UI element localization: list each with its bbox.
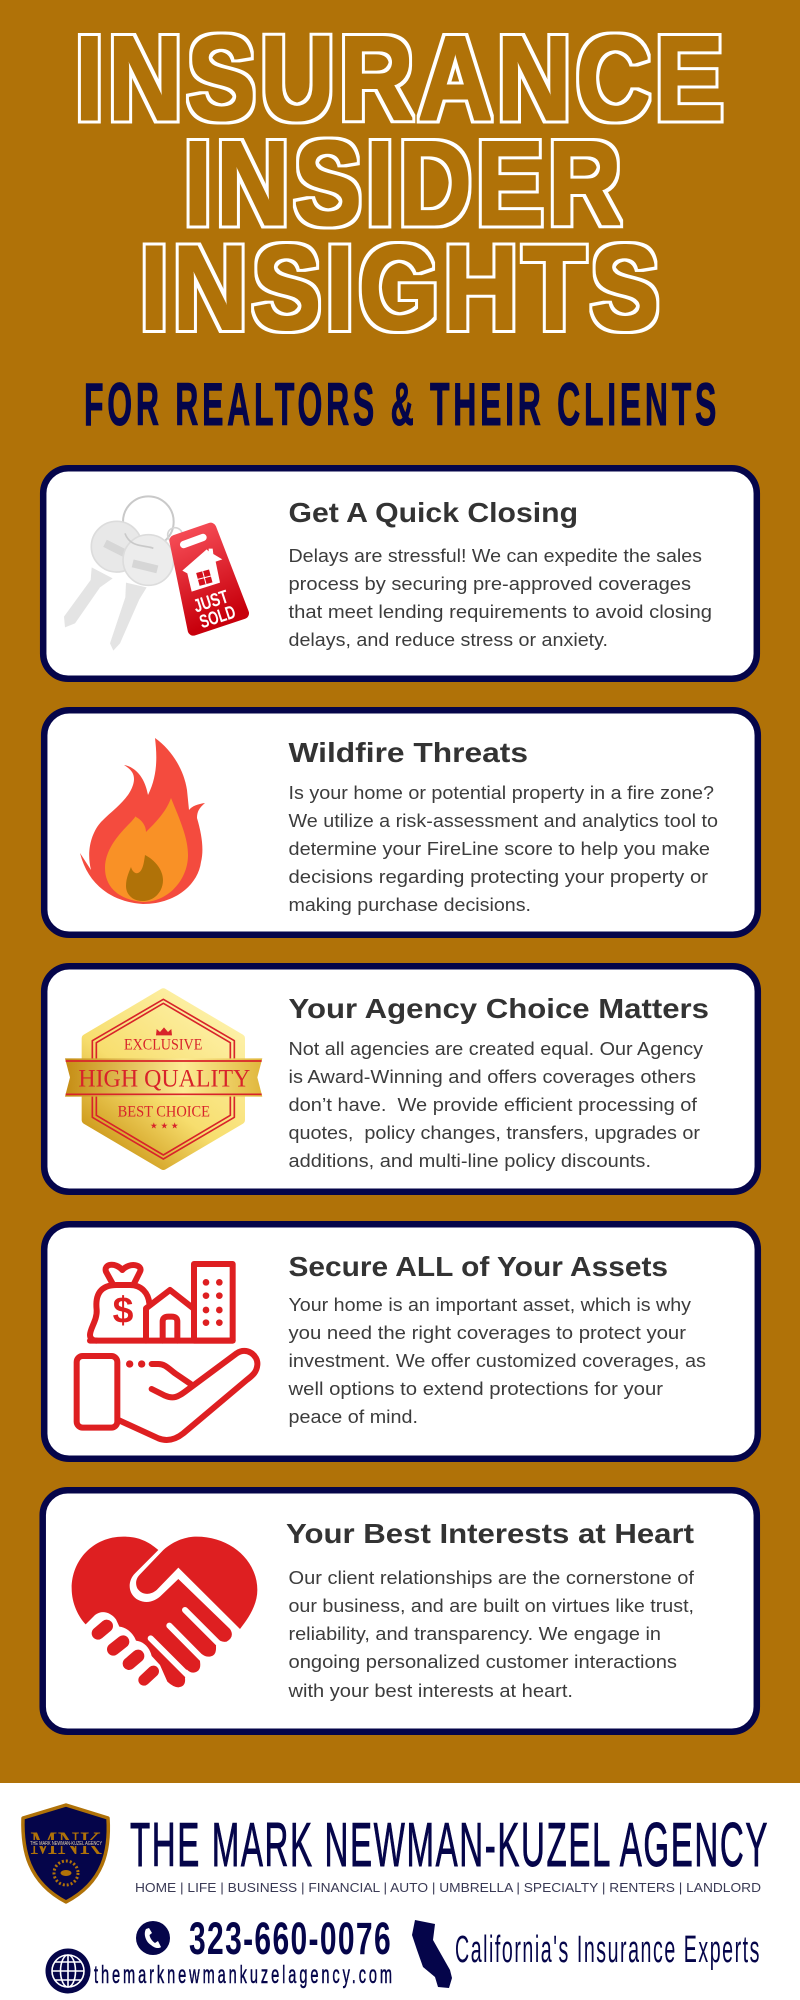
body text (287, 1567, 695, 1701)
body text: quotes, policy changes, transfers, upgrades or (288, 1122, 700, 1143)
body text: peace of mind. (288, 1406, 418, 1427)
heading: Wildfire Threats (288, 737, 528, 768)
phone number: 323-660-0076 (189, 1913, 392, 1964)
body text: ongoing personalized customer interactions (288, 1651, 677, 1672)
footer (0, 1783, 800, 2000)
title (75, 11, 728, 355)
panel: wildfire threats (44, 710, 758, 935)
body text: Not all agencies are created equal. Our Agency (288, 1038, 704, 1059)
icon: agency shield logo: MNK (30, 1826, 102, 1862)
body text: Is your home or potential property in a fire zone? (288, 782, 714, 803)
icon: phone (136, 1921, 170, 1955)
icon: agency shield logo (23, 1805, 108, 1902)
body text: investment. We offer customized coverages, as (288, 1350, 706, 1371)
body text: additions, and multi-line policy discounts. (288, 1150, 651, 1171)
icon: house keys with just sold tag: JUST (191, 585, 231, 616)
body text: We utilize a risk-assessment and analytics tool to (288, 810, 718, 831)
body text: reliability, and transparency. We engage in (288, 1623, 661, 1644)
body text: making purchase decisions. (288, 894, 531, 915)
icon: handshake heart (72, 1537, 257, 1687)
body text: delays, and reduce stress or anxiety. (288, 629, 608, 650)
body text: our business, and are built on virtues like trust, (288, 1595, 694, 1616)
body text: Delays are stressful! We can expedite the sales (288, 545, 702, 566)
body text: Our client relationships are the cornerstone of (288, 1567, 695, 1588)
body text: well options to extend protections for your (287, 1378, 663, 1399)
icon: high quality gold badge: ★★★ (150, 1121, 179, 1131)
icon: globe (46, 1948, 90, 1994)
body text (288, 782, 718, 915)
website: themarknewmankuzelagency.com (94, 1961, 395, 1989)
icon: california map (412, 1920, 452, 1988)
icon: high quality gold badge: BEST CHOICE (118, 1104, 210, 1121)
services list: HOME | LIFE | BUSINESS | FINANCIAL | AUTO | UMBRELLA | SPECIALTY | RENTERS | LANDLORD (135, 1880, 761, 1895)
panel: your agency choice matters (44, 966, 758, 1192)
body text: with your best interests at heart. (287, 1680, 573, 1701)
body text: is Award-Winning and offers coverages others (288, 1066, 696, 1087)
heading: Your Best Interests at Heart (286, 1518, 694, 1549)
body text: you need the right coverages to protect your (288, 1322, 686, 1343)
body text: don’t have. We provide efficient processing of (288, 1094, 698, 1115)
heading: Your Agency Choice Matters (288, 993, 709, 1024)
body text: that meet lending requirements to avoid closing (288, 601, 712, 622)
icon: assets held in hand: $ (113, 1289, 134, 1331)
panel: secure all of your assets (44, 1224, 758, 1459)
icon: assets held in hand (77, 1264, 257, 1440)
icon: agency shield logo: THE MARK NEWMAN-KUZEL AGENCY (30, 1841, 103, 1847)
icon: high quality gold badge: EXCLUSIVE (124, 1036, 202, 1053)
panel: get a quick closing (43, 468, 757, 679)
icon: high quality gold badge: HIGH QUALITY (78, 1065, 250, 1093)
body text (287, 1294, 706, 1427)
title: INSIDER (184, 116, 626, 250)
body text: decisions regarding protecting your property or (288, 866, 708, 887)
body text: Your home is an important asset, which is why (288, 1294, 692, 1315)
icon: flame (80, 738, 205, 904)
body text (288, 545, 712, 650)
panel: your best interests at heart (43, 1490, 757, 1732)
heading: Secure ALL of Your Assets (288, 1251, 668, 1282)
heading: Get A Quick Closing (288, 497, 578, 528)
icon: house keys with just sold tag (64, 496, 243, 651)
body text (288, 1038, 704, 1171)
icon: house keys with just sold tag: SOLD (197, 601, 238, 632)
body text: determine your FireLine score to help you make (288, 838, 710, 859)
icon: high quality gold badge (65, 993, 262, 1166)
title: INSIGHTS (140, 221, 664, 355)
body text: process by securing pre-approved coverages (288, 573, 691, 594)
